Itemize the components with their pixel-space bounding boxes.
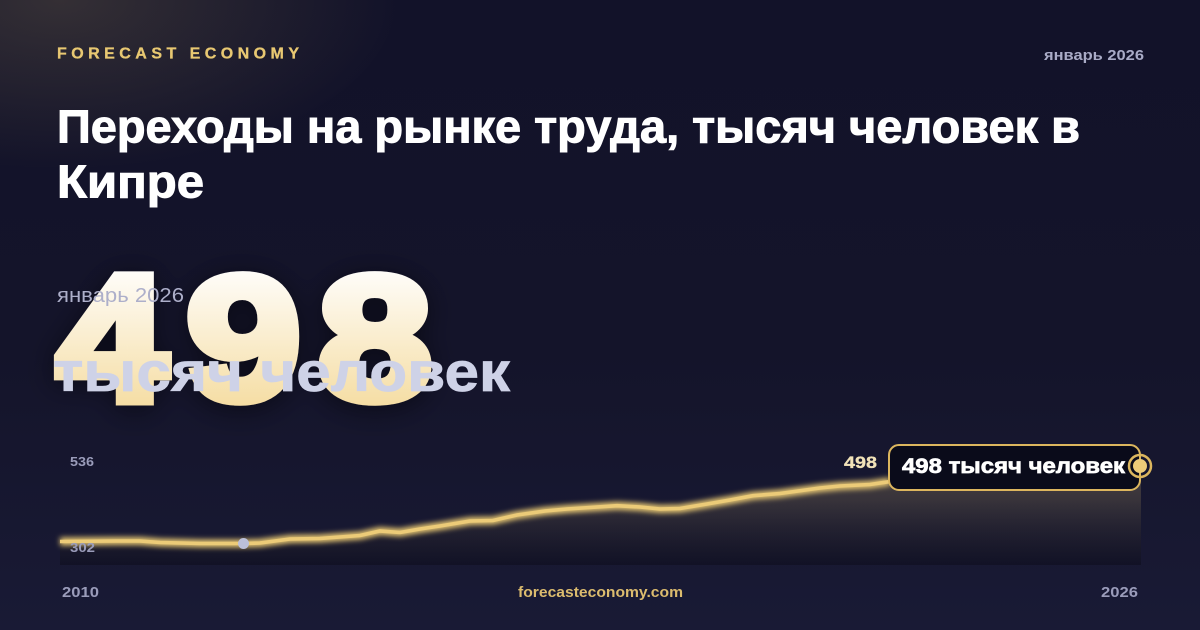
line glow bbox=[60, 482, 890, 544]
big number: 9 bbox=[186, 241, 301, 437]
big number: 8 bbox=[318, 241, 432, 437]
date top right: январь 2026 bbox=[1044, 47, 1144, 64]
unit label: тысяч человек bbox=[53, 340, 511, 403]
value label 498: 498 bbox=[844, 453, 877, 472]
callout: 498 тысяч человек bbox=[902, 455, 1126, 478]
big number: 4 bbox=[57, 238, 167, 438]
x axis end year: 2026 bbox=[1101, 584, 1138, 601]
source link: forecasteconomy.com bbox=[518, 584, 683, 601]
title: Переходы на рынке труда, тысяч человек в bbox=[57, 100, 1080, 152]
marker: mid point bbox=[238, 538, 249, 549]
title: Кипре bbox=[57, 156, 204, 208]
marker: last point bbox=[1129, 455, 1151, 477]
brand label: FORECAST ECONOMY bbox=[57, 46, 299, 62]
data line bbox=[60, 482, 890, 544]
chart bbox=[60, 445, 1151, 565]
callout bbox=[889, 445, 1140, 490]
axis max label: 536 bbox=[70, 454, 94, 469]
area under line bbox=[60, 466, 1141, 565]
x axis start year: 2010 bbox=[62, 584, 99, 601]
title bbox=[57, 100, 1080, 208]
date under title: январь 2026 bbox=[57, 285, 184, 307]
big number bbox=[57, 238, 432, 438]
axis min label: 302 bbox=[70, 540, 95, 555]
